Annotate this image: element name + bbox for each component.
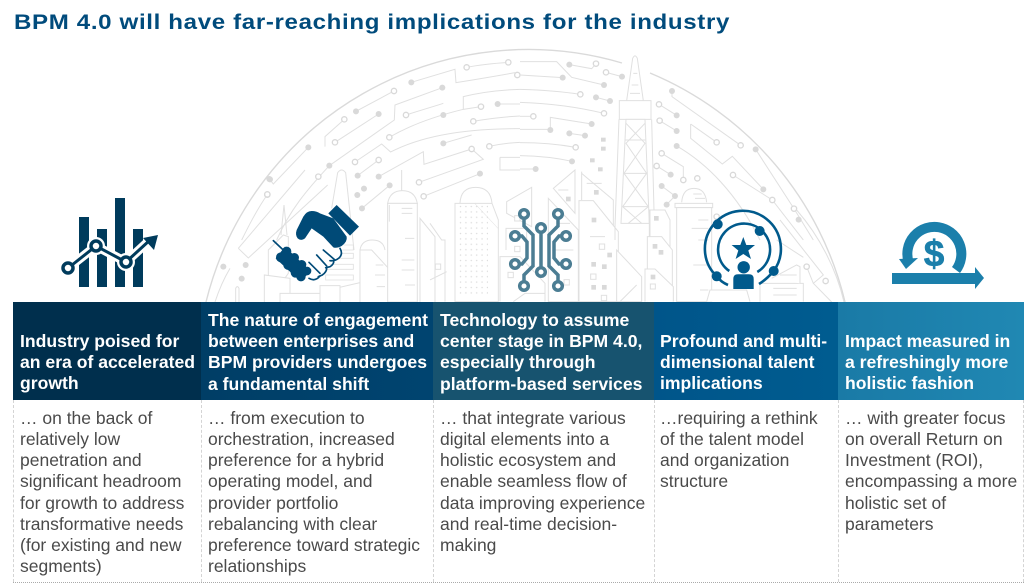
text block: column 2: preference for a hybrid	[208, 450, 384, 470]
panel: header 2	[201, 302, 433, 400]
panel: header 3: especially through	[440, 352, 595, 372]
text block: column 1	[20, 408, 184, 576]
panel: header 4: Profound and multi-	[660, 331, 827, 351]
text block: column 4: …requiring a rethink	[660, 408, 818, 428]
text block: column 2: … from execution to	[208, 408, 365, 428]
panel: header 4: implications	[660, 373, 763, 393]
skyline right section	[645, 188, 844, 302]
text block: column 3: making	[440, 535, 496, 555]
text block: column 3: enable seamless flow of	[440, 471, 627, 491]
icon: bar chart with trend line	[63, 198, 158, 287]
text block: column 5: … with greater focus	[845, 408, 1005, 428]
icon: circuit technology	[511, 210, 570, 290]
text block: column 5	[845, 408, 1017, 534]
panel: header 2: a fundamental shift	[208, 374, 369, 394]
icon: talent ring with star and person	[705, 211, 781, 289]
text block: column 3: data improving experience	[440, 492, 645, 512]
text block: column 4: of the talent model	[660, 429, 804, 449]
text block: column 4	[660, 408, 818, 491]
icon: circular dollar arrow: $	[924, 233, 945, 274]
panel: header 1	[13, 302, 201, 400]
panel: header 1: growth	[20, 373, 79, 393]
panel: header 4: dimensional talent	[660, 352, 814, 372]
background dome with circuits and skyline	[206, 50, 845, 302]
text block: column 1: … on the back of	[20, 408, 152, 428]
text block: column 3	[440, 408, 645, 555]
panel: header 5	[838, 302, 1024, 400]
text block: column 3: digital elements into a	[440, 429, 609, 449]
text block: column 2: operating model, and	[208, 471, 372, 491]
text block: column 5: encompassing a more	[845, 471, 1017, 491]
panel: header 1: Industry poised for	[20, 331, 179, 351]
panel: header 5: holistic fashion	[845, 373, 974, 393]
text block: column 3: holistic ecosystem and	[440, 450, 616, 470]
text block: column 2: preference toward strategic	[208, 535, 420, 555]
text block: column 4: structure	[660, 471, 728, 491]
panel: header 2: The nature of engagement	[208, 310, 428, 330]
text block: column 2: orchestration, increased	[208, 429, 395, 449]
panel: header 5: a refreshingly more	[845, 352, 1008, 372]
text block: column 1: for growth to address	[20, 492, 184, 512]
text block: column 2	[208, 408, 420, 576]
icon: handshake	[273, 205, 359, 281]
text block: column 5: parameters	[845, 514, 934, 534]
skyline tower	[590, 56, 670, 240]
text block: column 2: provider portfolio	[208, 492, 338, 512]
title: BPM 4.0 will have far-reaching implications for the industry	[14, 10, 730, 34]
text block: column 1: relatively low	[20, 429, 120, 449]
panel: header 3	[433, 302, 654, 400]
text block: column 1: significant headroom	[20, 471, 181, 491]
text block: column 2: relationships	[208, 556, 306, 576]
text block: column 1: penetration and	[20, 450, 142, 470]
panel: header 5: Impact measured in	[845, 331, 1010, 351]
text block: column 1: segments)	[20, 556, 102, 576]
panel: header 3: platform-based services	[440, 374, 642, 394]
text block: column 5: Investment (ROI),	[845, 450, 983, 470]
text block: column 4: and organization	[660, 450, 789, 470]
text block: column 2: rebalancing with clear	[208, 514, 377, 534]
panel: header 1: an era of accelerated	[20, 352, 195, 372]
skyline centre section	[430, 170, 642, 302]
text block: column 1: (for existing and new	[20, 535, 181, 555]
text block: column 1: transformative needs	[20, 514, 183, 534]
text block: column 5: holistic set of	[845, 492, 946, 512]
panel: header 2: between enterprises and	[208, 331, 414, 351]
panel: header 2: BPM providers undergoes	[208, 352, 427, 372]
panel: header 4	[654, 302, 838, 400]
skyline left section	[215, 170, 435, 302]
text block: column 3: and real-time decision-	[440, 514, 617, 534]
panel: header 3: Technology to assume	[440, 310, 629, 330]
text block: column 5: on overall Return on	[845, 429, 1003, 449]
icon: circular dollar arrow	[892, 227, 984, 289]
panel: header 3: center stage in BPM 4.0,	[440, 331, 642, 351]
text block: column 3: … that integrate various	[440, 408, 626, 428]
